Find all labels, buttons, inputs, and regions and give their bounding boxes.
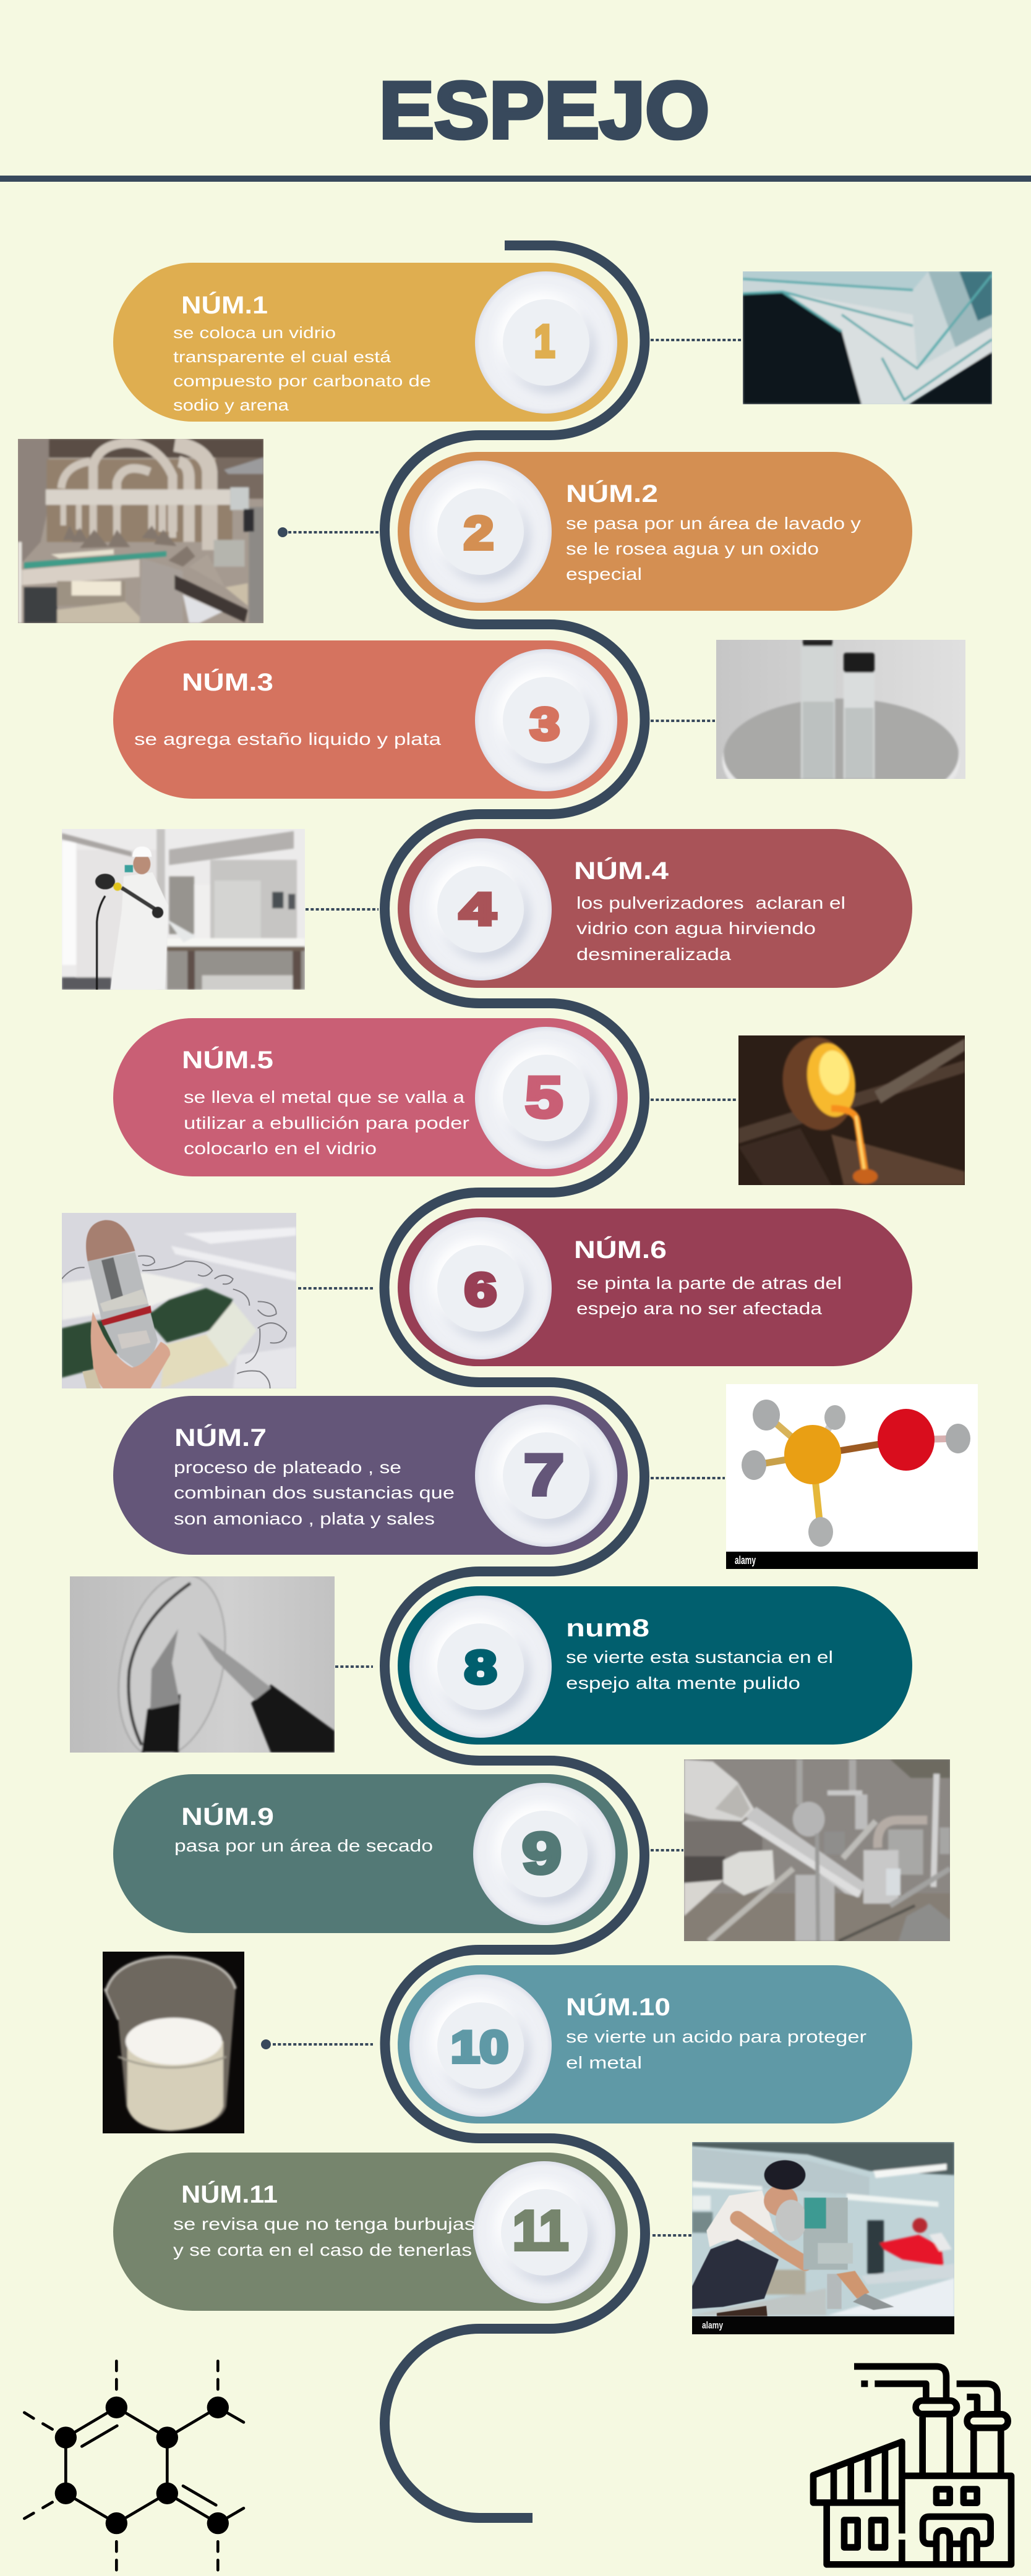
step 4 text (576, 893, 845, 964)
photo: liquid vials (716, 640, 965, 779)
photo: molecule model (726, 1384, 978, 1569)
step 2 panel (398, 452, 912, 611)
step 5 text: colocarlo en el vidrio (184, 1139, 377, 1158)
step 11 text (173, 2214, 475, 2259)
step 5 text: utilizar a ebullición para poder (184, 1113, 469, 1133)
step 10 text (566, 2027, 866, 2072)
photo: molten metal (738, 1035, 965, 1185)
step 2 number: 2 (464, 507, 494, 559)
step 3 number: 3 (530, 699, 560, 749)
icon: molecule (24, 2361, 244, 2570)
step 4 text: vidrio con agua hirviendo (576, 919, 816, 938)
step 11 text: y se corta en el caso de tenerlas (173, 2240, 472, 2259)
title rule (0, 176, 1031, 182)
connector 6 (298, 1287, 373, 1290)
step 10 panel (398, 1965, 912, 2123)
step 7 text: son amoniaco , plata y sales (174, 1509, 435, 1528)
step 5 text (184, 1087, 469, 1158)
step 6 text (576, 1273, 842, 1318)
step 2 text (566, 514, 861, 584)
step 5 text: se lleva el metal que se valla a (184, 1087, 465, 1107)
step 3 heading: NÚM.3 (182, 668, 273, 696)
step 3 text: se agrega estaño liquido y plata (134, 729, 442, 749)
step 2 text: especial (566, 564, 642, 584)
connector 4 (306, 908, 379, 911)
photo: glass sheets (743, 271, 992, 404)
step 8 number: 8 (464, 1641, 497, 1693)
step 7 text: proceso de plateado , se (174, 1458, 401, 1477)
step 1 number: 1 (534, 317, 555, 367)
photo: drying plant (684, 1759, 950, 1941)
step 8 text: se vierte esta sustancia en el (566, 1647, 833, 1667)
watermark: alamy (702, 2321, 723, 2331)
icon: factory (813, 2366, 1011, 2564)
title: ESPEJO (379, 65, 709, 155)
connector 2 (278, 527, 379, 537)
step 1 panel (113, 263, 628, 422)
step 8 text: espejo alta mente pulido (566, 1673, 800, 1693)
step 6 text: espejo ara no ser afectada (576, 1299, 823, 1318)
step 7 text (174, 1458, 455, 1528)
step 10 heading: NÚM.10 (566, 1992, 670, 2021)
step 3 panel (113, 640, 628, 799)
photo: worker at cutting machine (692, 2142, 954, 2334)
step 5 heading: NÚM.5 (182, 1045, 273, 1074)
step 1 text: se coloca un vidrio (173, 323, 336, 342)
step 9 heading: NÚM.9 (181, 1802, 274, 1830)
step 9 panel (113, 1774, 628, 1933)
step 6 text: se pinta la parte de atras del (576, 1273, 842, 1293)
step 4 panel (398, 829, 912, 988)
step 2 text: se pasa por un área de lavado y (566, 514, 861, 533)
step 9 number: 9 (522, 1821, 562, 1885)
step 4 text: los pulverizadores aclaran el (576, 893, 845, 912)
step 7 number: 7 (524, 1442, 564, 1507)
photo: beaker with white crystals (103, 1952, 244, 2133)
step 11 panel (113, 2153, 628, 2311)
step 6 panel (398, 1209, 912, 1366)
step 4 text: desmineralizada (576, 945, 732, 964)
step 9 text: pasa por un área de secado (174, 1836, 433, 1855)
connector 3 (651, 720, 715, 722)
step 10 text: se vierte un acido para proteger (566, 2027, 866, 2046)
step 2 heading: NÚM.2 (566, 479, 658, 508)
step 6 heading: NÚM.6 (574, 1235, 667, 1264)
step 6 number: 6 (464, 1264, 497, 1316)
step 11 number: 11 (513, 2200, 568, 2262)
step 1 text: transparente el cual está (173, 347, 391, 366)
step 7 panel (113, 1396, 628, 1555)
step 7 text: combinan dos sustancias que (174, 1483, 455, 1502)
step 10 number: 10 (451, 2023, 508, 2072)
step 1 heading: NÚM.1 (181, 291, 268, 319)
connector 9 (651, 1849, 683, 1851)
step 8 heading: num8 (566, 1615, 649, 1642)
step 11 text: se revisa que no tenga burbujas (173, 2214, 475, 2234)
connector 1 (651, 339, 742, 341)
connector 7 (651, 1477, 725, 1479)
connector 11 (652, 2234, 691, 2237)
photo: worker with pressure washer (62, 829, 305, 990)
step 4 number: 4 (460, 885, 496, 935)
photo: washing machinery (18, 439, 263, 623)
connector 10 (261, 2039, 373, 2049)
step 1 text: sodio y arena (173, 396, 289, 414)
step 2 text: se le rosea agua y un oxido (566, 539, 819, 558)
step 1 text (173, 323, 431, 414)
step 5 panel (113, 1018, 628, 1176)
photo: spray can and mirror (62, 1213, 296, 1388)
step 4 heading: NÚM.4 (574, 856, 669, 885)
watermark: alamy (735, 1554, 756, 1566)
step 10 text: el metal (566, 2053, 642, 2072)
photo: hands on a round mirror (70, 1576, 335, 1753)
serpentine timeline path (384, 245, 645, 2518)
step 11 heading: NÚM.11 (181, 2180, 278, 2208)
step 8 panel (398, 1586, 912, 1745)
connector 5 (651, 1099, 738, 1101)
step 5 number: 5 (525, 1065, 563, 1129)
connector 8 (335, 1665, 373, 1668)
step 1 text: compuesto por carbonato de (173, 372, 431, 390)
step 8 text (566, 1647, 833, 1693)
step 7 heading: NÚM.7 (174, 1423, 267, 1452)
